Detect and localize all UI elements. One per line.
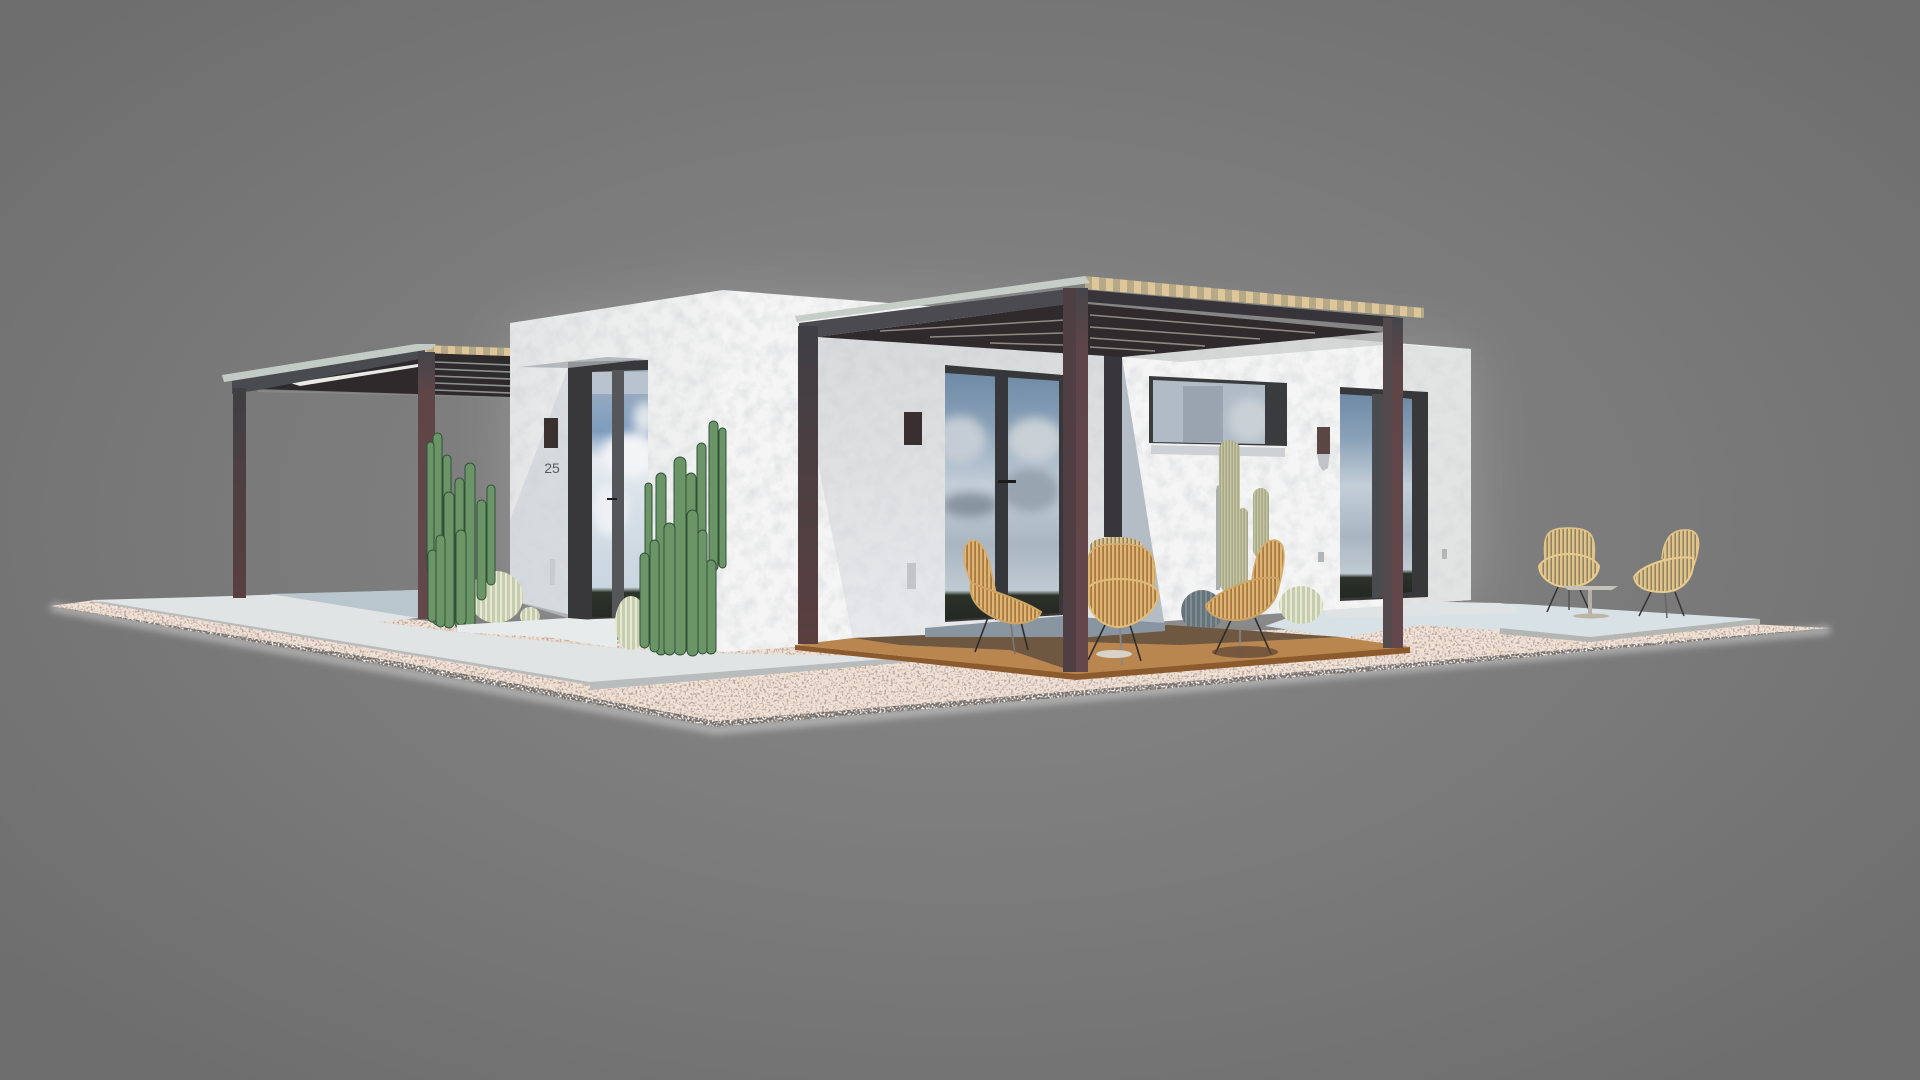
building (510, 290, 1471, 652)
patio step (925, 616, 1165, 637)
roof corrugated edge (1085, 276, 1424, 318)
chair A (1539, 528, 1599, 612)
far wall shade (1403, 345, 1471, 605)
chair left (964, 540, 1041, 654)
front post (1063, 288, 1088, 672)
left pergola (222, 344, 510, 619)
gravel edge glow (51, 607, 1830, 730)
right concrete slab (1265, 600, 1760, 642)
sliding door center (934, 365, 1063, 622)
gravel dark lip (51, 606, 1830, 727)
saguaro cactus (1216, 440, 1269, 598)
entry step (457, 618, 617, 648)
patio chair pair right (1539, 528, 1699, 618)
left pergola roof (423, 345, 510, 356)
barrel cactus entry (615, 596, 647, 650)
chair right (1206, 540, 1284, 658)
soffit with slats (816, 303, 1383, 357)
left pergola far post (233, 388, 246, 598)
side table (1096, 650, 1132, 658)
deck shadow (853, 625, 1340, 672)
left pergola near post (418, 352, 435, 619)
pergola wall (723, 290, 1471, 652)
chair B (1634, 530, 1699, 618)
barrel cactus slate (1181, 590, 1223, 632)
house number: 25 (544, 460, 560, 476)
chair center (1087, 544, 1158, 665)
wooden deck (795, 625, 1410, 680)
back post (1104, 353, 1122, 537)
left concrete slab (92, 590, 910, 690)
side table (1563, 586, 1618, 618)
door canopy (519, 357, 648, 368)
soft top-of-wall shade (1122, 332, 1383, 362)
ground plot (51, 590, 1830, 730)
gravel bed (51, 600, 1830, 721)
entry wall shadow (510, 368, 568, 618)
wall niches right (1318, 549, 1447, 562)
wall light center (904, 412, 922, 445)
building halo glow (510, 295, 1480, 650)
clerestory window (1149, 376, 1287, 457)
wedge shadow (1122, 357, 1165, 628)
entry wall (510, 290, 723, 652)
entry door (519, 357, 658, 620)
main pergola (795, 276, 1424, 672)
columnar cactus left (427, 433, 495, 628)
right main beam (1088, 290, 1403, 328)
window sill shadow (1151, 445, 1285, 457)
wall light right (1317, 427, 1330, 471)
left pergola slats (258, 353, 510, 398)
right step (1325, 600, 1517, 618)
right post (1383, 318, 1403, 648)
chair back center behind (1090, 537, 1143, 575)
wall niche left (550, 559, 555, 585)
shaded wall under pergola (818, 338, 1104, 640)
wall light left (544, 418, 558, 448)
left post (798, 326, 818, 644)
roof top slab (795, 276, 1090, 322)
sliding door right (1340, 387, 1428, 601)
scene: desert house render (48, 199, 1834, 838)
wall niche center (907, 563, 916, 589)
barrel cactus pale (1279, 586, 1323, 624)
barrel cactus left (469, 571, 540, 625)
left pergola beam (232, 350, 425, 394)
left main beam (799, 288, 1076, 340)
columnar cactus right (640, 421, 726, 656)
